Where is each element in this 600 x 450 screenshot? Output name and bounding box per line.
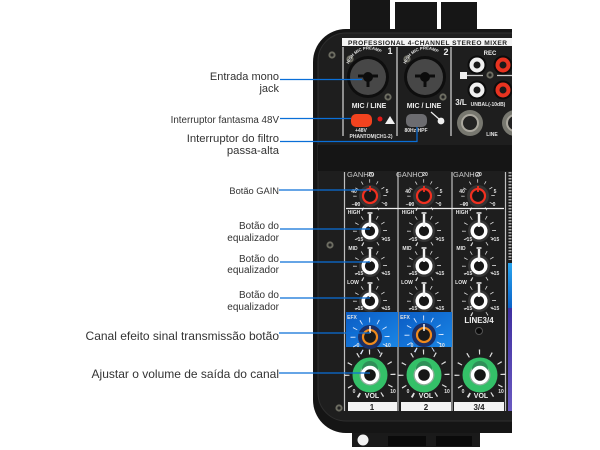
channel 2 combo jack: HIGH MIC PREAMP (403, 46, 438, 64)
mic line labels: MIC / LINE (352, 103, 387, 110)
volume knobs: VOL (474, 393, 489, 400)
gain knobs row: GANHO (347, 170, 375, 179)
channel number strips: 1 (370, 403, 375, 412)
label: effect send: Canal efeito sinal transmissão botão (86, 329, 279, 343)
EFX blue panels (346, 312, 452, 354)
equalizer knobs MID: +15 (382, 271, 390, 277)
label: equalizer mid: equalizador (227, 265, 280, 276)
equalizer knobs HIGH: −15 (464, 237, 472, 243)
gain knobs row: 40 (459, 189, 465, 195)
equalizer knobs LOW: LOW (347, 280, 359, 286)
gain knobs row: 20 (476, 172, 482, 178)
RCA and line inputs: REC (484, 51, 497, 57)
equalizer knobs LOW: +15 (491, 306, 499, 312)
equalizer knobs LOW: +15 (436, 306, 444, 312)
volume knobs: 0 (462, 389, 465, 395)
equalizer knobs LOW: −15 (409, 306, 417, 312)
bottom mounting tabs (352, 433, 480, 447)
phantom power switch (350, 114, 395, 140)
gain knobs row: −60 (406, 202, 414, 208)
volume knobs: VOL (365, 393, 380, 400)
volume knobs: 10 (444, 389, 450, 395)
label: high-pass switch: passa-alta (227, 145, 280, 157)
line 3/4 label and indicator: LINE3/4 (464, 316, 494, 325)
mic line labels (352, 102, 442, 108)
equalizer knobs HIGH: HIGH (402, 210, 415, 216)
equalizer knobs MID: +15 (436, 271, 444, 277)
gain knobs row: GANHO (396, 170, 424, 179)
label: gain knob: Botão GAIN (229, 186, 279, 196)
equalizer knobs HIGH: HIGH (456, 210, 469, 216)
EFX blue panels: 0 (357, 343, 360, 349)
label: channel volume: Ajustar o volume de saída do canal (92, 367, 279, 381)
EFX blue panels: EFX (347, 315, 358, 321)
RCA and line inputs: UNBAL(-10dB) (471, 102, 506, 108)
gain knobs row: 20 (422, 172, 428, 178)
RCA and line inputs: 3/L (455, 98, 467, 107)
equalizer knobs MID (348, 246, 500, 282)
label: equalizer low: equalizador (227, 302, 280, 313)
gain knobs row: −60 (352, 202, 360, 208)
label: equalizer mid: Botão do (239, 254, 279, 265)
gain knobs row: GANHO (453, 170, 481, 179)
equalizer knobs MID: −15 (464, 271, 472, 277)
equalizer knobs LOW: LOW (455, 280, 467, 286)
equalizer knobs MID: MID (456, 246, 466, 252)
equalizer knobs HIGH: +15 (436, 237, 444, 243)
volume knobs: 10 (390, 389, 396, 395)
channel number strips (348, 402, 504, 412)
equalizer knobs MID: MID (402, 246, 412, 252)
EFX blue panels: 10 (385, 343, 391, 349)
dark band between sections (318, 145, 518, 171)
gain knobs row: 40 (351, 189, 357, 195)
channel number strips: 3/4 (473, 403, 485, 412)
gain knobs row: 40 (405, 189, 411, 195)
channel number strips: 2 (424, 403, 429, 412)
volume knobs: VOL (419, 393, 434, 400)
equalizer knobs HIGH: −15 (355, 237, 363, 243)
EFX blue panels: EFX (400, 315, 411, 321)
label: phantom switch: Interruptor fantasma 48V (171, 115, 279, 126)
gain knobs row: 5 (440, 189, 443, 195)
volume knobs: 10 (498, 389, 504, 395)
label: high-pass switch: Interruptor do filtro (187, 133, 279, 145)
equalizer knobs LOW: −15 (355, 306, 363, 312)
mixer device (313, 0, 512, 447)
label: equalizer high: Botão do (239, 221, 279, 232)
channel 2 combo jack: 2 (443, 47, 449, 57)
equalizer knobs HIGH: HIGH (348, 210, 361, 216)
channel 1 combo jack (346, 46, 392, 101)
EFX blue panels: 0 (411, 343, 414, 349)
equalizer knobs MID: +15 (491, 271, 499, 277)
equalizer knobs HIGH: +15 (491, 237, 499, 243)
equalizer knobs MID: MID (348, 246, 358, 252)
label: equalizer high: equalizador (227, 233, 280, 244)
equalizer knobs LOW: −15 (464, 306, 472, 312)
label: mono jack input: Entrada mono (210, 71, 279, 83)
RCA and line inputs: LINE (486, 132, 498, 138)
gain knobs row: 20 (368, 172, 374, 178)
equalizer knobs HIGH: +15 (382, 237, 390, 243)
gain knobs row: 5 (494, 189, 497, 195)
phantom power switch: +48V (355, 128, 368, 134)
line 3/4 label and indicator (464, 316, 494, 334)
right meter strip (508, 172, 512, 411)
gain knobs row (347, 172, 496, 211)
equalizer knobs LOW: +15 (382, 306, 390, 312)
title strip (342, 38, 512, 46)
channel 2 combo jack (403, 46, 448, 101)
callout lines (279, 80, 417, 373)
channel 1 combo jack: 1 (387, 46, 393, 56)
equalizer knobs HIGH: −15 (409, 237, 417, 243)
gain separator (346, 208, 504, 210)
high-pass filter switch (404, 112, 444, 134)
label: equalizer low: Botão do (239, 290, 279, 301)
label: mono jack input: jack (258, 83, 279, 95)
volume knobs: 0 (407, 389, 410, 395)
equalizer knobs MID: −15 (409, 271, 417, 277)
top mounting tabs (350, 0, 477, 32)
equalizer knobs LOW: LOW (401, 280, 413, 286)
gain knobs row: −60 (460, 202, 468, 208)
gain knobs row: 0 (439, 202, 442, 208)
RCA and line inputs (456, 50, 512, 136)
section dividers (343, 47, 506, 411)
gain knobs row: 0 (493, 202, 496, 208)
screws (326, 51, 494, 412)
mic line labels: MIC / LINE (407, 103, 442, 110)
equalizer knobs MID: −15 (355, 271, 363, 277)
equalizer knobs LOW (347, 280, 500, 316)
volume knobs: 0 (353, 389, 356, 395)
phantom power switch: PHANTOM(CH1-2) (350, 134, 393, 140)
gain knobs row: 0 (385, 202, 388, 208)
equalizer knobs HIGH (348, 210, 500, 246)
volume knobs (344, 350, 506, 398)
case body (313, 29, 512, 433)
channel 1 combo jack: HIGH MIC PREAMP (346, 46, 382, 64)
faceplate (318, 32, 512, 422)
title strip: PROFESSIONAL 4-CHANNEL STEREO MIXER (348, 40, 507, 47)
gain knobs row: 5 (386, 189, 389, 195)
high-pass filter switch: 80Hz HPF (404, 128, 428, 134)
EFX blue panels: 10 (439, 343, 445, 349)
